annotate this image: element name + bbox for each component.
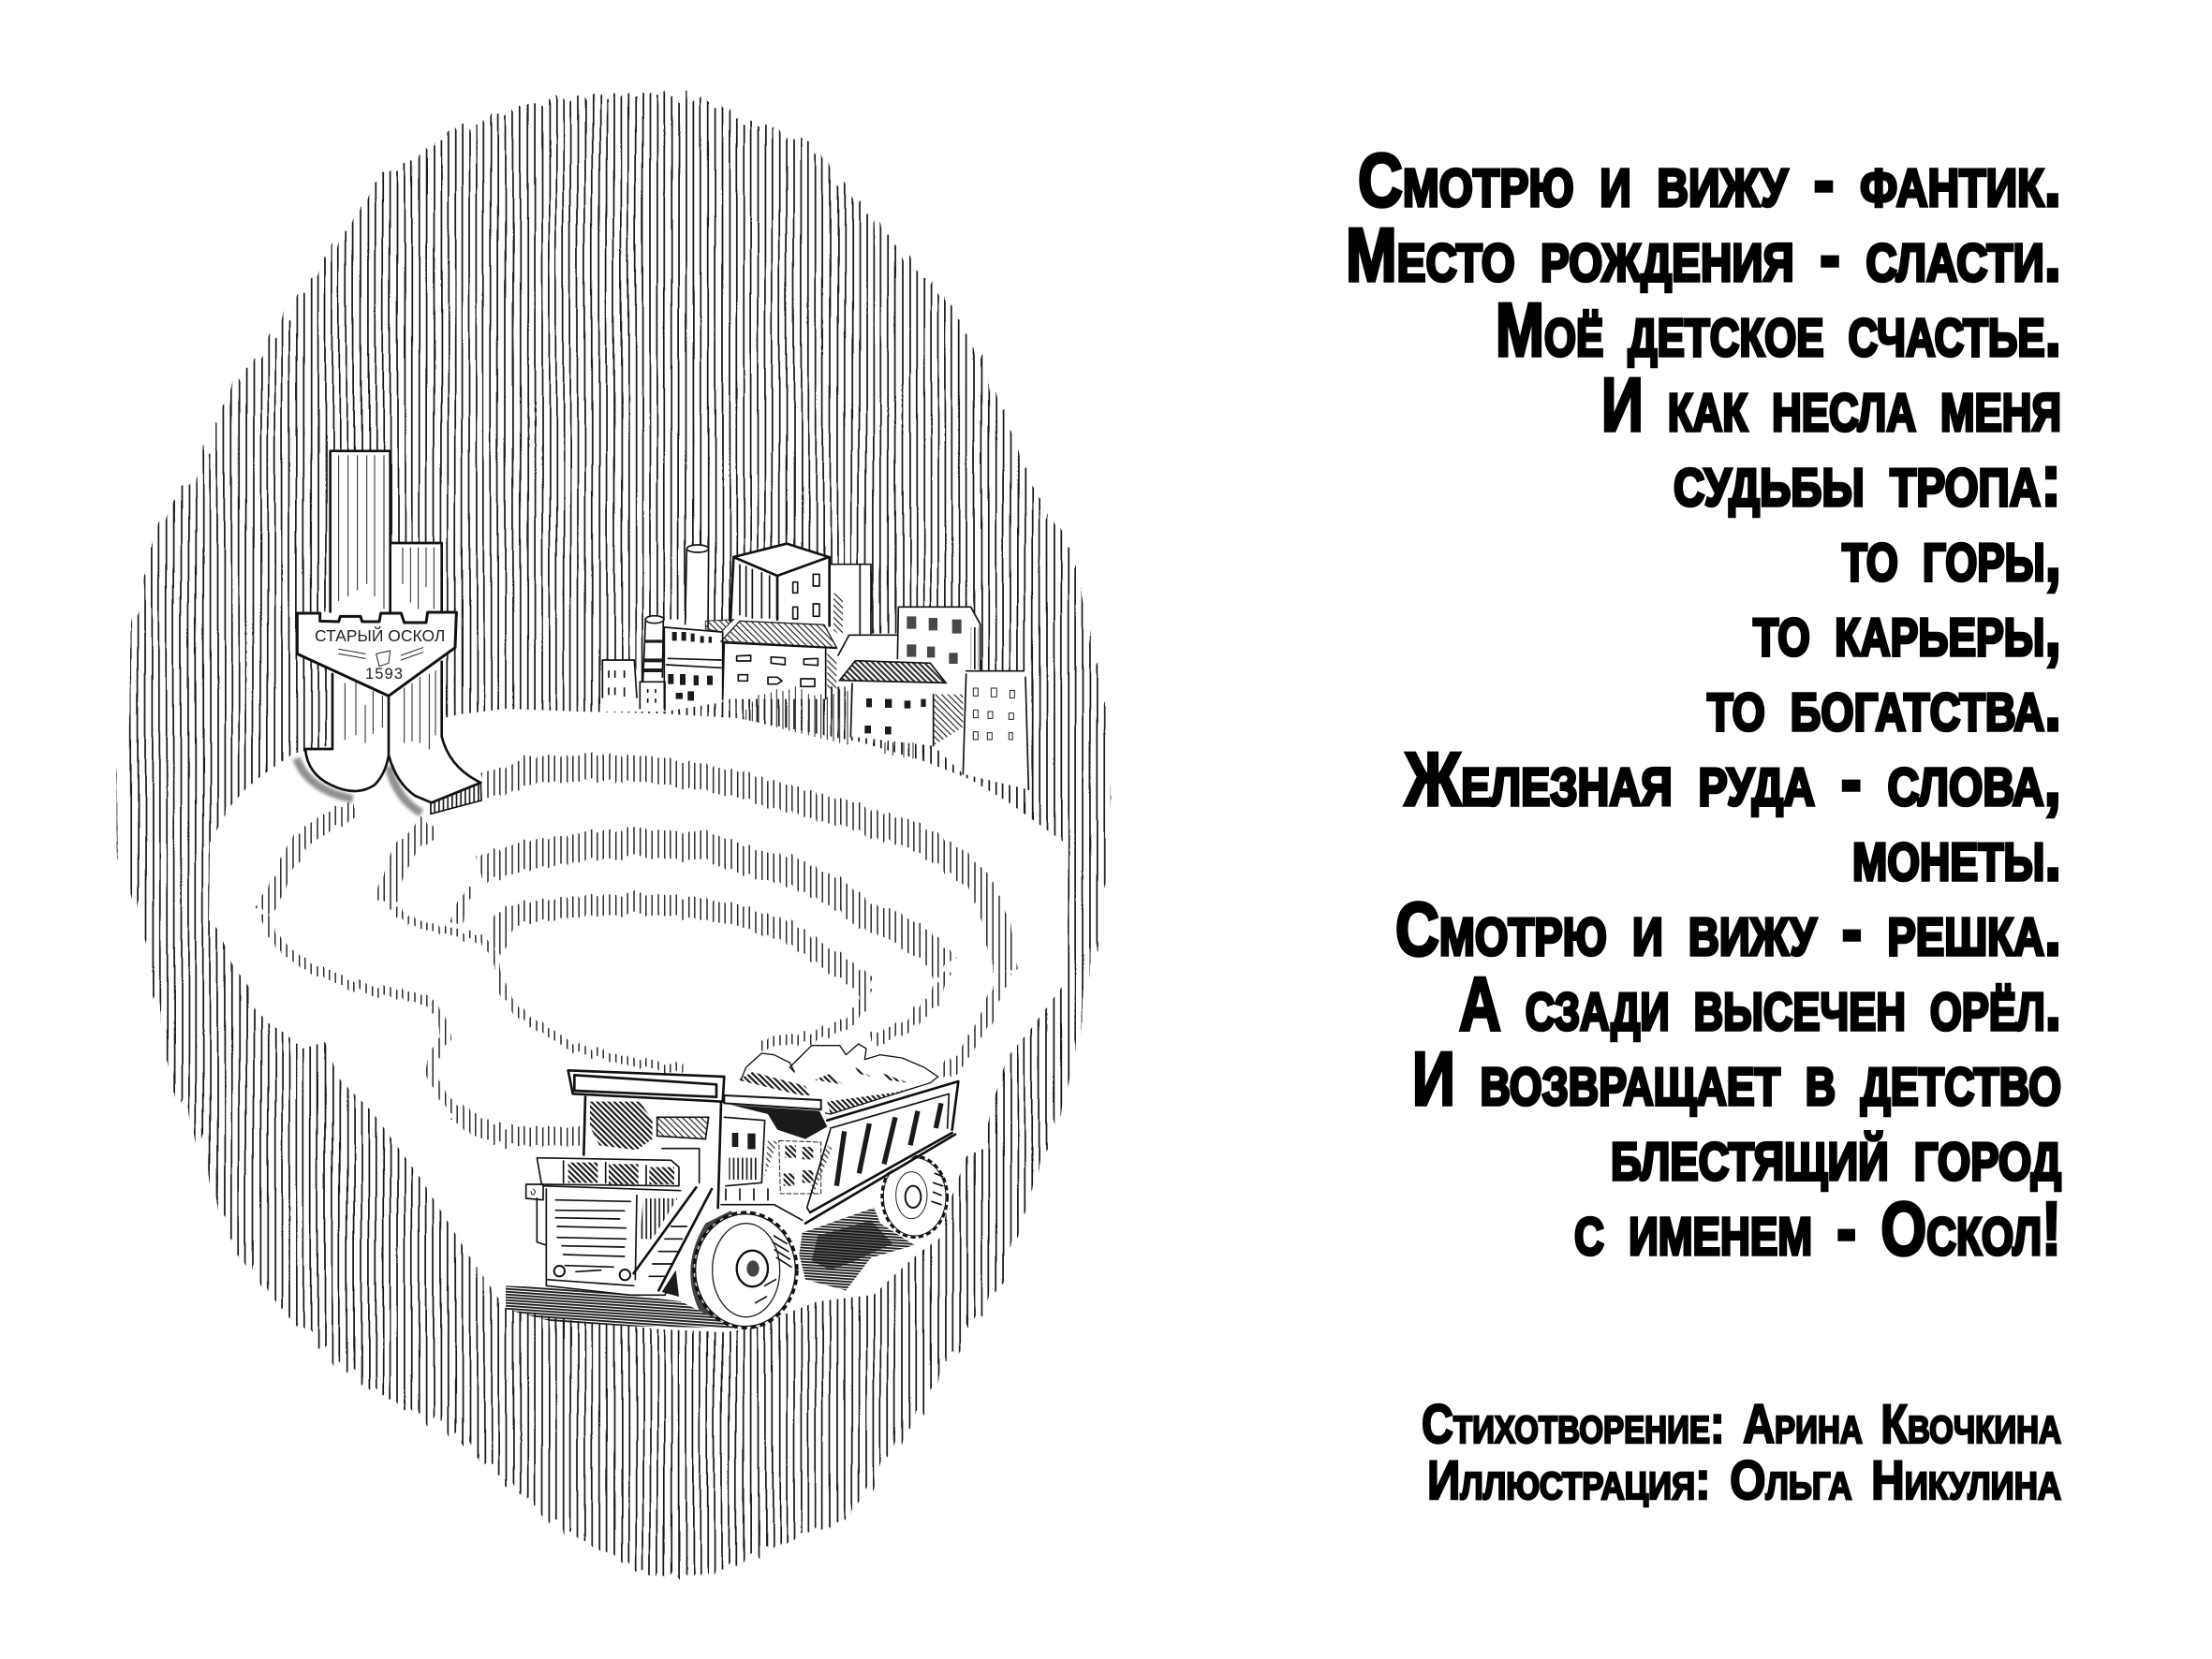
right building [963, 671, 1028, 789]
side hatching strips [827, 593, 843, 693]
poem text: Железная руда - слова, [1404, 738, 2061, 822]
credits: Иллюстрация: Ольга Никулина [1427, 1450, 2061, 1511]
tall chimney [686, 549, 709, 627]
poem text: блестящий город [1611, 1112, 2061, 1197]
body emblem [765, 1139, 832, 1196]
low buildings [602, 660, 665, 710]
main roof [721, 621, 836, 648]
truck body silhouette [526, 1070, 958, 1295]
cube building [730, 544, 830, 625]
cab side window [657, 1117, 709, 1139]
credits: Стихотворение: Арина Квочкина [1422, 1394, 2061, 1455]
poem text: то карьеры, [1753, 588, 2061, 672]
front wheel [690, 1211, 797, 1328]
poem text [1346, 139, 2061, 1271]
rear wheel [882, 1156, 948, 1238]
left factory [664, 627, 723, 709]
windshield [537, 1158, 679, 1186]
poem text: Моё детское счастье. [1496, 288, 2061, 373]
small striped chimney [643, 620, 663, 681]
poem text: с именем - Оскол! [1574, 1187, 2061, 1271]
building silhouettes [602, 544, 1028, 789]
shelf beam [724, 1095, 821, 1109]
ore load [735, 1044, 938, 1114]
hatched roof [840, 661, 946, 683]
quarry terrace rings [234, 740, 1030, 1161]
city skyline: factory and buildings [602, 544, 1028, 789]
sparse tower hatching [339, 456, 435, 749]
poem text: И как несла меня [1601, 363, 2061, 448]
cross-hatched wall [934, 695, 963, 746]
poem text: то горы, [1842, 513, 2061, 597]
poem text: то богатства. [1707, 663, 2061, 747]
poem text: Место рождения - сласти. [1346, 213, 2061, 298]
poem text: Смотрю и вижу - фантик. [1358, 139, 2061, 223]
sign inscription: СТАРЫЙ ОСКОЛ [315, 626, 445, 645]
left ground shadow [506, 1285, 737, 1328]
access stairs [630, 1187, 712, 1297]
dump truck carrying ore [506, 1044, 958, 1328]
cab rear dark recess [730, 1105, 827, 1139]
monument: Stary Oskol sign [297, 451, 481, 814]
monument silhouette [297, 451, 481, 814]
shield decoration [339, 648, 423, 667]
factory windows [668, 632, 713, 700]
engine housing [662, 1117, 803, 1220]
adjacent tower [831, 565, 871, 634]
main building walls and windows [723, 643, 836, 699]
poem text: Смотрю и вижу - решка. [1395, 888, 2061, 972]
monument outlines [305, 451, 480, 802]
hood and radiator [526, 1184, 681, 1295]
hatched oval background [84, 75, 1143, 1592]
cube windows and wall hatching [740, 565, 819, 619]
small back roof [705, 620, 733, 632]
front building [850, 683, 934, 746]
shield with battlements [297, 612, 456, 696]
poem text: монеты. [1852, 813, 2061, 897]
poem text: И возвращает в детство [1412, 1037, 2061, 1122]
dump bed [805, 1081, 958, 1224]
poem text: судьбы тропа: [1674, 438, 2061, 522]
right ground shadow [799, 1208, 915, 1290]
ground shadow under boots [297, 758, 421, 813]
canopy [568, 1070, 724, 1102]
rear building with dark windows [838, 607, 981, 669]
background hatch visible between buildings [746, 686, 913, 758]
boot sole [431, 783, 481, 814]
cab side window hatch [590, 1102, 653, 1150]
founding year: 1593 [365, 665, 403, 683]
credits [1422, 1394, 2061, 1511]
cab wall [583, 1097, 721, 1208]
